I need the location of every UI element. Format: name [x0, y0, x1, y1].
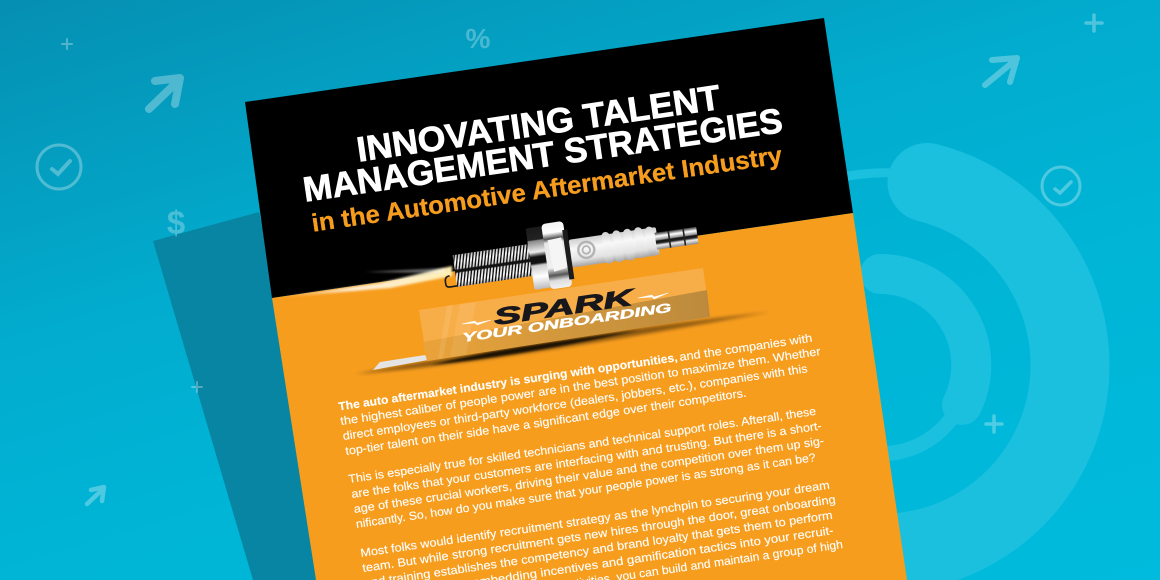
icon: plus top left [62, 39, 72, 49]
text block: paragraph 2: are the folks that your customers are interfacing with and trusting. But there is a short- [351, 420, 823, 501]
icon: percent: % [466, 23, 491, 54]
icon: plus lower left [192, 382, 202, 392]
text block: paragraph 3: Most folks would identify recruitment strategy as the lynchpin to securing your dream [360, 479, 830, 560]
icon: dollar sign: $ [167, 204, 185, 241]
text block: paragraph 2: nificantly. So, how do you make sure that your people power is as strong as it can be? [355, 451, 817, 531]
subtitle: in the Automotive Aftermarket Industry [310, 141, 784, 238]
icon: plus top right [1086, 15, 1102, 31]
banner blade [373, 355, 428, 370]
concentric ring graphic [818, 173, 1070, 553]
page header black [245, 18, 853, 298]
icon: check circle left [37, 145, 81, 189]
text block: paragraph 1: The auto aftermarket industry is surging with opportunities, [338, 351, 678, 413]
icon: plus right lower [986, 416, 1002, 432]
terminal [655, 227, 699, 250]
text block: paragraph 1: direct employees or third-party workforce (dealers, jobbers, etc.), companies with this [342, 362, 809, 443]
text block: paragraph 1: and the companies with [679, 332, 813, 364]
text block: paragraph 3: team. But while strong recruitment gets new hires through the door, great onboarding [362, 493, 836, 575]
thread [453, 244, 533, 287]
banner text your onboarding: YOUR ONBOARDING [461, 301, 673, 345]
shadow page [153, 212, 340, 580]
text block: paragraph 3 [360, 479, 844, 580]
title: INNOVATING TALENT [354, 78, 723, 170]
spark flare [273, 266, 452, 298]
ground electrode [445, 274, 461, 287]
icon: check circle right [1042, 167, 1080, 205]
text block: paragraph 1: top-tier talent on their side have a significant edge over their competitors. [345, 387, 747, 458]
icon: spark plug [439, 202, 702, 304]
icon: arrow right [985, 58, 1017, 85]
text block: paragraph 1: the highest caliber of people power are in the best position to maximize them. Whether [340, 345, 821, 428]
text block: paragraph 2: This is especially true for skilled technicians and technical support roles. Afterall, these [348, 405, 817, 486]
banner shadow [355, 312, 770, 374]
title: MANAGEMENT STRATEGIES [301, 101, 785, 210]
page body orange [272, 213, 907, 580]
collar [526, 226, 551, 290]
text block: paragraph 2 [348, 405, 825, 531]
text block: paragraph 1 [338, 332, 821, 458]
banner text spark: SPARK [492, 284, 637, 330]
ceramic insulator [568, 225, 660, 269]
panel: document page [245, 18, 907, 580]
banner: spark your onboarding [419, 268, 710, 361]
hex nut [541, 221, 575, 289]
icon: large arrow [149, 78, 180, 109]
icon: small arrow [87, 487, 104, 504]
text block: paragraph 2: age of these crucial workers, driving their value and the competition over them up sig- [353, 435, 825, 516]
